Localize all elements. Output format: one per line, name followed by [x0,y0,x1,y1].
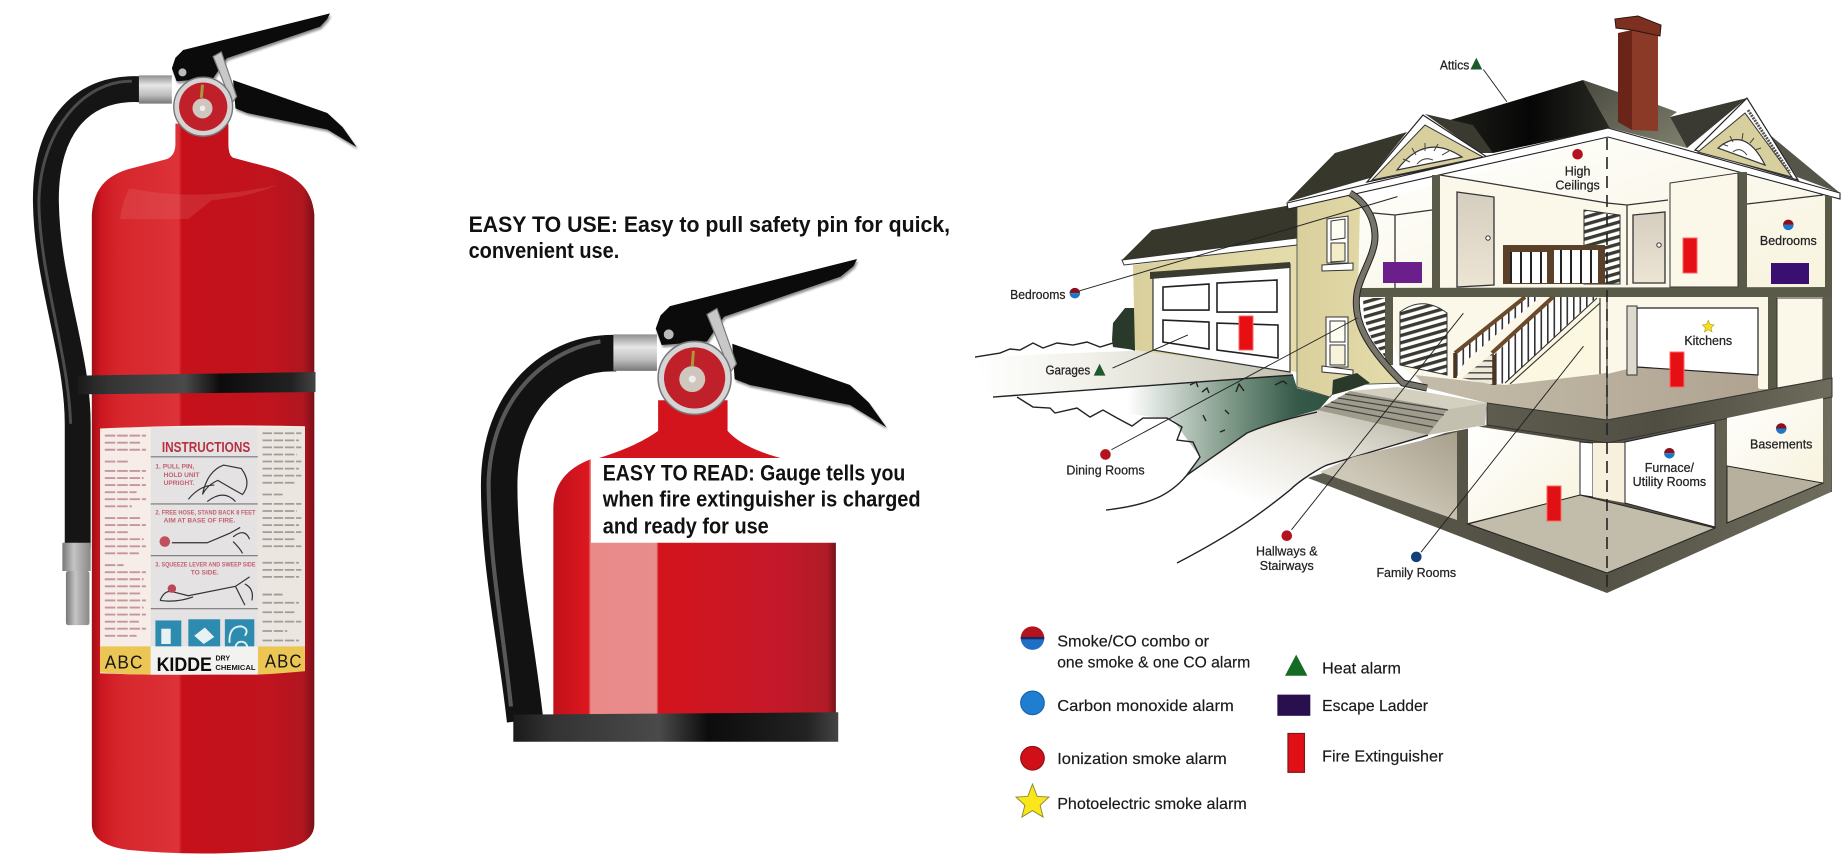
ground outlines [975,342,1428,563]
upper lever [172,13,330,81]
easy to read callout: when fire extinguisher is charged [602,486,921,511]
front lower window [1322,317,1353,375]
gable side roof [1425,114,1493,153]
right column fine print [263,433,301,640]
walkway [1106,410,1428,563]
step 1: HOLD UNIT [164,472,199,479]
lower lever [233,80,357,147]
left roof [1287,132,1407,202]
legend: fire extinguisher: Fire Extinguisher [1322,749,1443,766]
extinguisher marker upper [1683,238,1697,273]
shoulder highlight [120,185,278,219]
leader lines [1080,69,1583,552]
label: hallways and stairways: Hallways & [1256,545,1318,559]
far right roof [1770,135,1840,193]
label: attics [1440,58,1482,72]
legend: smoke CO combo: one smoke & one CO alarm [1057,655,1250,672]
brand strip: KIDDE [157,654,212,676]
label: high ceilings [1555,149,1600,193]
easy to read callout: EASY TO READ: Gauge tells you [603,460,905,485]
label: kitchens [1684,320,1732,348]
lower floor surface [1415,367,1823,420]
label: bedrooms right: Bedrooms [1760,234,1817,248]
right cell [1777,298,1823,388]
close-up bracket band [513,712,838,742]
label: high ceilings: Ceilings [1555,179,1600,193]
step 3: 3. SQUEEZE LEVER AND SWEEP SIDE [155,561,256,568]
label: hallways and stairways [1256,530,1318,573]
legend: heat alarm: Heat alarm [1322,660,1401,677]
upper interior [1358,137,1832,292]
nozzle [62,543,91,625]
garage roof [1122,204,1297,260]
large fire extinguisher [39,13,357,854]
house cut edge [1350,193,1427,388]
kitchen room [1607,298,1768,389]
dashed center line [1606,138,1608,593]
basement cream strip [1593,443,1625,503]
lower floor interior [1380,297,1825,420]
close-up hose [489,341,617,721]
easy to use caption: EASY TO USE: Easy to pull safety pin for quick, [469,212,950,237]
legend: smoke CO combo: Smoke/CO combo or [1057,633,1209,650]
basement room left [1468,425,1580,523]
floor slab [1487,378,1832,443]
step 2: 2. FREE HOSE, STAND BACK 8 FEET [155,510,255,517]
label: bedrooms left: Bedrooms [1010,288,1065,302]
instruction label [100,425,305,676]
far door [1633,212,1665,283]
label: furnace utility rooms: Furnace/ [1645,461,1695,475]
label: garages: Garages [1045,363,1090,377]
easy to use caption: convenient use. [469,238,619,263]
lower right post [1768,297,1777,389]
main roof grey section [1583,80,1687,148]
legend: ionization [1021,746,1227,770]
hose [39,81,144,549]
driveway [975,350,1293,397]
left gable [1367,115,1487,182]
left column fine print [105,436,146,636]
close-up neck and shoulder [591,400,790,460]
instructions heading: INSTRUCTIONS [162,440,250,456]
legend: escape ladder [1277,695,1428,716]
house labels [1010,58,1817,580]
main black roof [1450,80,1610,153]
brand strip: CHEMICAL [215,665,256,672]
easy to use caption [469,212,950,263]
close-up body [553,459,836,721]
legend: carbon monoxide [1021,691,1234,715]
basement room right [1727,398,1823,483]
legend: escape ladder: Escape Ladder [1322,698,1428,715]
close-up extinguisher [489,259,932,742]
garage door [1150,262,1290,372]
label: basements: Basements [1750,438,1812,452]
step 1: 1. PULL PIN, [155,464,195,471]
extinguisher body [92,124,314,854]
step 3 [155,561,256,605]
label: family rooms [1376,552,1456,580]
legend: photoelectric [1016,784,1247,817]
upper posts and lines [1373,172,1832,292]
label: dining rooms [1066,449,1145,477]
basement shell [1308,397,1832,593]
step 3: TO SIDE. [191,570,219,577]
label: bedrooms right [1760,220,1817,248]
shrub by steps [1332,373,1370,395]
extinguisher marker basement [1547,486,1561,521]
close-up hose connector [613,334,657,371]
lower post [1385,297,1393,365]
garage wall [1133,245,1297,372]
furnace room [1625,423,1715,527]
chimney [1615,16,1661,131]
house cutaway illustration [975,16,1840,593]
corner post [1600,298,1607,420]
ABC right: ABC [265,651,303,672]
label: high ceilings: High [1565,164,1590,178]
label: attics: Attics [1440,58,1469,72]
upper stair hatching [1584,210,1620,284]
legend [1016,626,1443,817]
bracket band [78,372,316,394]
step 1: UPRIGHT. [164,480,195,487]
step 2: AIM AT BASE OF FIRE. [164,518,235,525]
label: basements [1750,423,1812,452]
porch and steps [1317,387,1487,435]
legend: carbon monoxide: Carbon monoxide alarm [1057,698,1234,715]
stairs [1455,297,1600,385]
label: dining rooms: Dining Rooms [1066,463,1145,477]
label: furnace utility rooms: Utility Rooms [1633,475,1706,489]
legend: ionization: Ionization smoke alarm [1057,751,1227,768]
right outer wall [1823,297,1832,492]
extinguisher marker kitchen [1670,352,1684,387]
escape ladder upper left [1383,262,1422,283]
legend: heat alarm [1285,655,1401,677]
wall hatching [1363,298,1385,357]
left upper door [1457,192,1494,287]
right gable [1695,98,1798,180]
lever pivot hole [178,68,186,76]
safety pin clip [213,52,237,103]
ABC left: ABC [105,652,144,673]
right wall section [1670,173,1738,287]
label: hallways and stairways: Stairways [1260,559,1314,573]
floor beam [1354,287,1832,298]
basement earth floor [1320,432,1457,520]
step 2 [155,510,255,553]
close-up lower lever [732,344,887,427]
basement white strip [1580,442,1593,497]
eaves fascia [1287,128,1840,209]
legend: fire extinguisher [1288,733,1443,772]
basement floor [1468,495,1715,573]
escape ladder upper right [1771,263,1809,284]
close-up upper lever [656,259,857,345]
brand strip: DRY [215,655,230,662]
extinguisher marker garage [1239,316,1253,350]
step 1 [155,464,247,502]
right room floor [1727,466,1823,523]
legend: smoke CO combo [1021,626,1250,672]
label: kitchens: Kitchens [1684,334,1732,348]
label: furnace utility rooms [1633,448,1706,489]
front tan wall [1297,193,1403,397]
close-up pivot hole [664,329,674,339]
gauge [174,77,233,136]
garage fascia [1122,238,1297,265]
brand strip [151,646,258,676]
extinguisher class icons [155,619,254,653]
valve head and handle [172,13,357,147]
stair wall [1505,298,1600,383]
lawn [993,375,1330,478]
main upper room wall [1440,173,1738,287]
arch hatching [1400,304,1447,375]
close-up valve head [656,259,887,427]
close-up pin [707,308,736,372]
front upper window [1322,216,1353,271]
yellow ABC strips [100,646,151,675]
close-up gauge [658,341,731,414]
label: family rooms: Family Rooms [1376,566,1456,580]
dormer roof right [1670,98,1747,148]
bush [1112,308,1135,350]
legend: photoelectric: Photoelectric smoke alarm [1057,796,1247,813]
balcony railing [1503,245,1605,284]
hose connector [139,75,172,104]
easy to read callout: and ready for use [603,513,769,538]
easy to read callout [591,458,932,543]
